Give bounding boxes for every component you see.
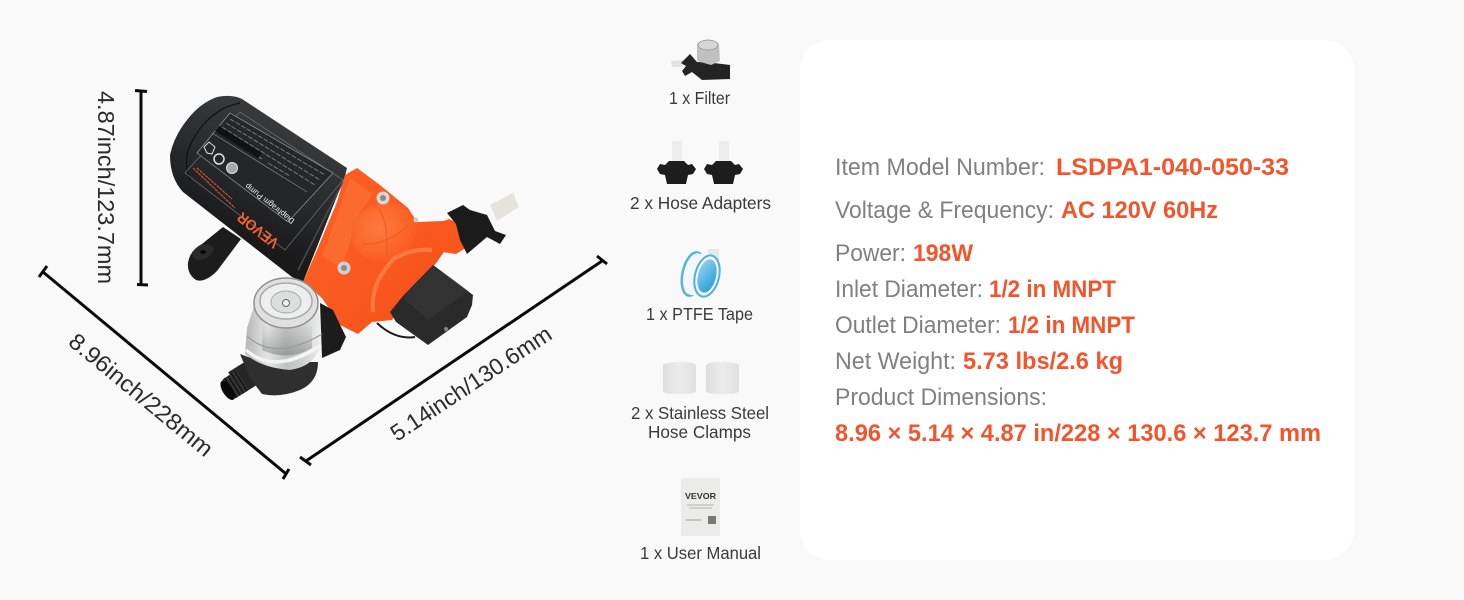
end cap seam [186, 103, 240, 180]
clamps caption: 2 x Stainless Steel [631, 403, 769, 423]
outlet stub [490, 193, 519, 221]
tape caption: 1 x PTFE Tape [646, 304, 753, 324]
pump product illustration [170, 96, 519, 402]
height dimension label: 4.87inch/123.7mm [93, 91, 119, 284]
filter glass bowl [245, 306, 321, 370]
filter base [240, 354, 318, 395]
spec: power: Power: [835, 240, 906, 267]
filter caption: 1 x Filter [669, 88, 730, 108]
clamp icon left [663, 362, 696, 394]
certification icons [204, 142, 238, 174]
pump dome [343, 193, 425, 271]
accessory: user manual [640, 478, 761, 563]
brand name: VEVOR [234, 208, 282, 251]
clamps caption second line: Hose Clamps [648, 422, 751, 442]
flange ring [373, 250, 432, 312]
spec: inlet: 1/2 in MNPT [989, 276, 1116, 303]
clamp icon right [706, 362, 739, 394]
spec: voltage: Voltage & Frequency: [835, 197, 1054, 224]
black inlet collar [320, 303, 346, 358]
length dimension arrow [39, 266, 289, 479]
width dimension arrow [300, 256, 607, 465]
spec: model number: Item Model Number: [835, 154, 1045, 181]
rating label on motor [185, 112, 343, 251]
adapter icon right [704, 141, 743, 184]
filter top lens [254, 278, 318, 328]
motor cylinder [170, 96, 347, 282]
spec: weight: Net Weight: [835, 348, 956, 375]
spec: model number [835, 154, 1289, 181]
spec: inlet: Inlet Diameter: [835, 276, 983, 303]
accessory: hose clamps [631, 362, 769, 442]
accessory: PTFE tape [646, 249, 753, 324]
width dimension label: 5.14inch/130.6mm [385, 320, 556, 446]
tape roll icon [678, 249, 724, 299]
spec: dimensions heading: Product Dimensions: [835, 384, 1047, 411]
outlet wing nut [447, 205, 506, 254]
spec: dimensions value: 8.96 × 5.14 × 4.87 in/228 × 130.6 × 123.7 mm [835, 420, 1321, 447]
adapters caption: 2 x Hose Adapters [630, 193, 771, 213]
spec: power [835, 240, 973, 267]
screws [338, 192, 418, 274]
spec: outlet: 1/2 in MNPT [1008, 312, 1135, 339]
wiring [377, 323, 415, 337]
collar seam [298, 178, 345, 270]
spec: power: 198W [913, 240, 973, 267]
spec: weight: 5.73 lbs/2.6 kg [963, 348, 1123, 375]
pressure switch box [390, 265, 473, 345]
mounting foot [188, 227, 241, 281]
outlet thread [428, 219, 472, 254]
red warning lines [193, 168, 235, 208]
filter icon [671, 40, 730, 80]
length dimension label: 8.96inch/228mm [64, 328, 218, 462]
specification list [835, 154, 1321, 447]
accessory: hose adapters [630, 141, 771, 213]
white specification panel [800, 40, 1354, 560]
threaded inlet [215, 358, 264, 402]
accessory: filter [669, 40, 730, 108]
spec: outlet: Outlet Diameter: [835, 312, 1001, 339]
height dimension arrow [135, 90, 148, 285]
spec: model number: LSDPA1-040-050-33 [1056, 154, 1289, 181]
manual caption: 1 x User Manual [640, 543, 761, 563]
orange pump head [303, 168, 452, 334]
product name: Diaphragm Pump [243, 181, 296, 226]
spec: outlet [835, 312, 1135, 339]
spec: inlet [835, 276, 1116, 303]
spec: weight [835, 348, 1123, 375]
spec: voltage: AC 120V 60Hz [1061, 197, 1218, 224]
manual icon: VEVOR [685, 491, 716, 501]
adapter icon left [657, 141, 696, 184]
spec: voltage [835, 197, 1218, 224]
